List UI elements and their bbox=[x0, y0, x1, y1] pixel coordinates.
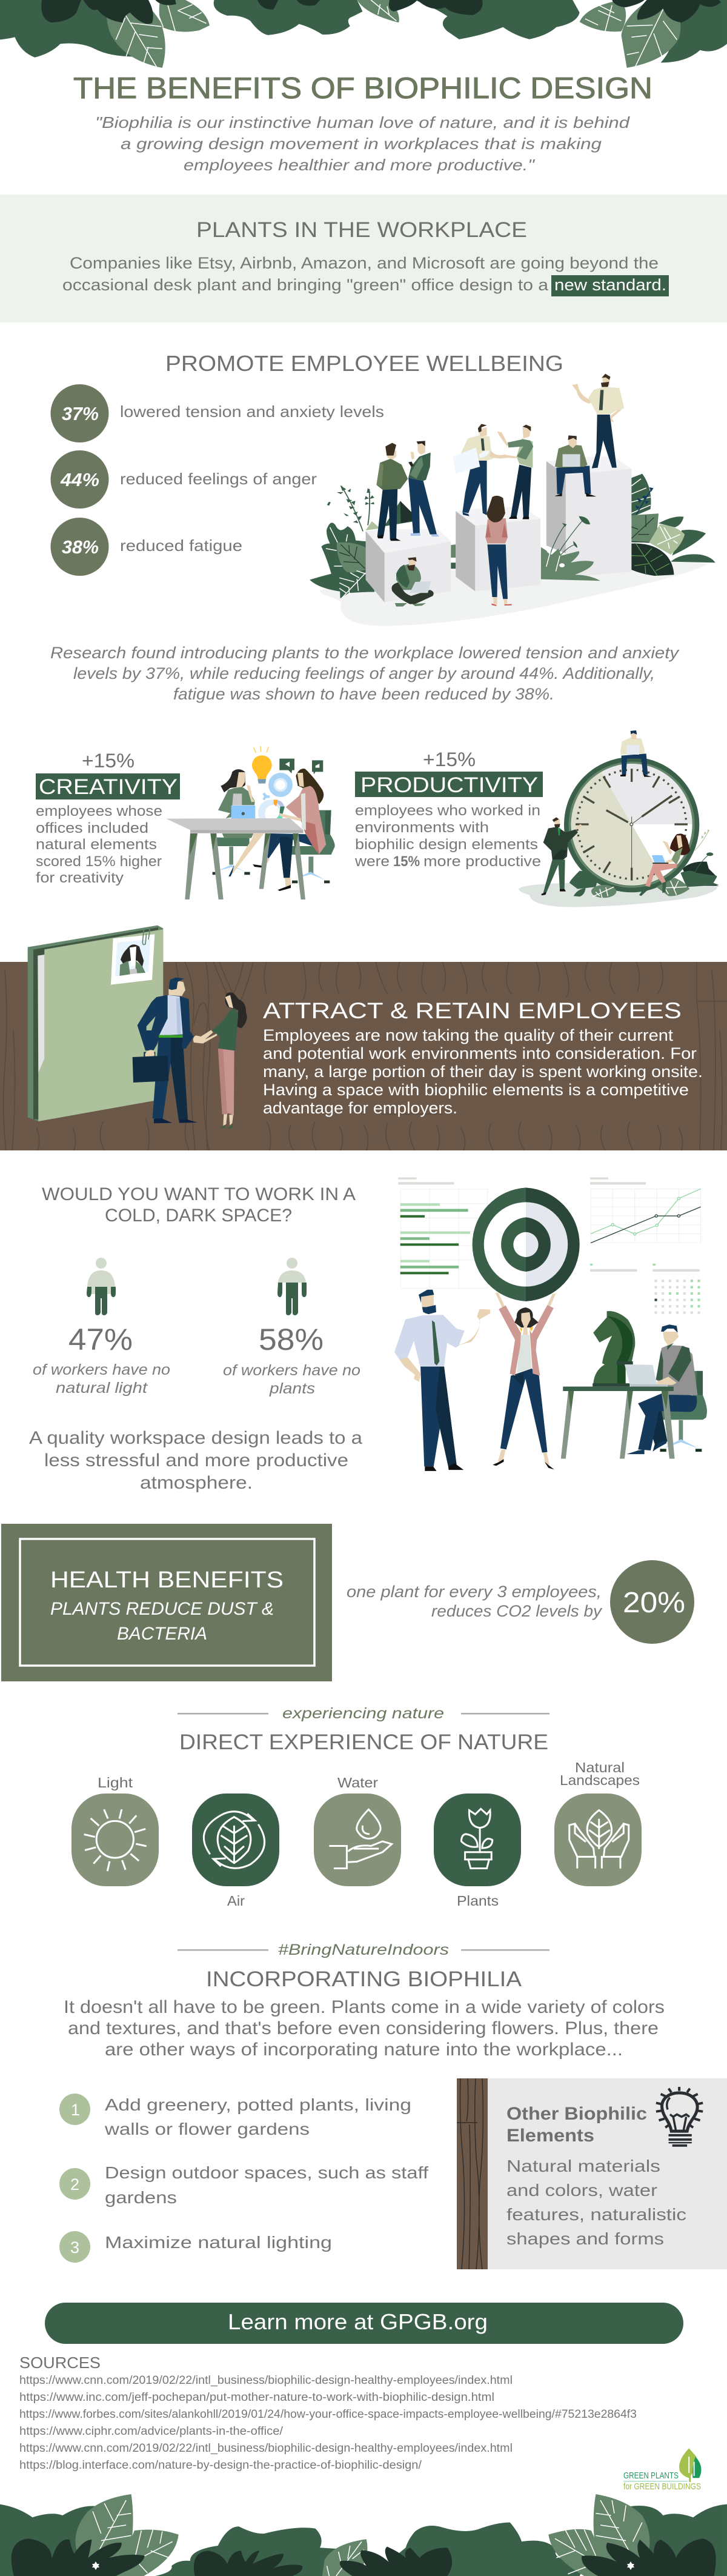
incorporating paragraph: and textures, and that's before even considering flowers. Plus, there bbox=[68, 2018, 659, 2038]
sources: https://www.forbes.com/sites/alankohll/2019/01/24/how-your-office-space-impacts-employee-wellbeing/#75213e2864f3 bbox=[19, 2408, 637, 2421]
blocks bbox=[451, 544, 456, 558]
creativity text: for creativity bbox=[36, 870, 124, 886]
productivity label: PRODUCTIVITY bbox=[360, 773, 538, 797]
icon labels bbox=[98, 1760, 640, 1909]
divider: experiencing nature: experiencing nature bbox=[282, 1705, 444, 1722]
panel: productivity bbox=[354, 749, 543, 870]
list item 1: 1 bbox=[71, 2101, 80, 2119]
figure: seated man with laptop bbox=[555, 435, 596, 496]
productivity text: biophilic design elements bbox=[355, 836, 538, 853]
illustration: target, charts and team bbox=[394, 1178, 707, 1471]
creativity text: offices included bbox=[36, 820, 148, 836]
list item 1 bbox=[59, 2094, 411, 2138]
productivity text: were bbox=[354, 853, 390, 870]
intro quote: "Biophilia is our instinctive human love of nature, and it is behind bbox=[95, 113, 631, 132]
bar chart background bbox=[398, 1178, 488, 1288]
icon labels: Light bbox=[98, 1775, 133, 1790]
panel: other biophilic elements bbox=[457, 2078, 727, 2269]
panel: health benefits: HEALTH BENEFITS bbox=[50, 1567, 284, 1593]
research paragraph: fatigue was shown to have been reduced by 38%. bbox=[173, 685, 554, 703]
centre plant bbox=[541, 516, 600, 581]
chair right bbox=[291, 810, 335, 855]
call to action button bbox=[45, 2303, 683, 2344]
productivity text bbox=[354, 802, 541, 870]
heading: cold dark space bbox=[42, 1184, 356, 1226]
paragraph: Having a space with biophilic elements is a competitive bbox=[263, 1081, 689, 1099]
list item 3: Maximize natural lighting bbox=[105, 2233, 332, 2252]
paragraph: occasional desk plant and bringing "green" office design to a bbox=[62, 276, 549, 294]
stat: 38 percent: reduced fatigue bbox=[120, 536, 242, 555]
panel: productivity: +15% bbox=[423, 749, 476, 770]
stat: 58 percent no plants: of workers have no bbox=[223, 1362, 360, 1379]
body text: shapes and forms bbox=[506, 2229, 664, 2248]
line chart background bbox=[590, 1178, 701, 1243]
quality workspace statement: A quality workspace design leads to a bbox=[29, 1428, 362, 1448]
resume photo bbox=[111, 934, 154, 985]
creativity text: scored 15% higher bbox=[36, 853, 162, 870]
stat: 20 percent bbox=[610, 1560, 694, 1644]
research paragraph: Research found introducing plants to the workplace lowered tension and anxiety bbox=[50, 644, 680, 662]
creativity text: natural elements bbox=[36, 836, 157, 853]
stat: 58 percent no plants: 58% bbox=[259, 1323, 324, 1356]
icon: water bbox=[314, 1794, 401, 1886]
icon labels: Landscapes bbox=[560, 1772, 640, 1788]
figure: standing bearded man bbox=[572, 374, 624, 469]
illustration: two women at table bbox=[166, 746, 335, 899]
flower right bbox=[627, 2561, 634, 2570]
stat: 37 percent bbox=[51, 384, 384, 442]
research paragraph: levels by 37%, while reducing feelings of anger by around 44%. Additionally, bbox=[73, 664, 655, 682]
body text: Natural materials bbox=[506, 2157, 660, 2175]
figure: top man bbox=[620, 730, 652, 777]
CO2 callout text: one plant for every 3 employees, bbox=[347, 1583, 602, 1601]
productivity text: 15% bbox=[393, 853, 420, 870]
icon: natural landscapes bbox=[554, 1794, 642, 1886]
left plants bbox=[310, 486, 413, 598]
heading: cold dark space: WOULD YOU WANT TO WORK IN A bbox=[42, 1184, 356, 1204]
paragraph: Companies like Etsy, Airbnb, Amazon, and Microsoft are going beyond the bbox=[70, 254, 659, 272]
icon: light bbox=[71, 1794, 159, 1886]
incorporating paragraph bbox=[64, 1997, 665, 2060]
subheading: Other Biophilic bbox=[506, 2104, 647, 2124]
panel: attract and retain employees bbox=[0, 926, 727, 1150]
list item 1: Add greenery, potted plants, living bbox=[105, 2095, 411, 2114]
figure: man in green from behind bbox=[376, 443, 408, 541]
paragraph bbox=[62, 254, 659, 294]
creativity text: employees whose bbox=[36, 803, 162, 819]
sources: https://www.cnn.com/2019/02/22/intl_business/biophilic-design-healthy-employees/index.html bbox=[19, 2442, 513, 2455]
intro quote bbox=[95, 113, 631, 174]
stat: 58 percent no plants: plants bbox=[269, 1380, 315, 1397]
icon: light bulb bbox=[656, 2087, 703, 2147]
stat: 58 percent no plants bbox=[223, 1323, 360, 1397]
productivity text: more productive bbox=[423, 853, 541, 870]
figure: woman with laptop bbox=[639, 833, 690, 896]
research paragraph bbox=[50, 644, 680, 703]
logo: green plants for green buildings: GREEN PLANTS bbox=[623, 2471, 679, 2481]
intro quote: employees healthier and more productive." bbox=[184, 156, 536, 174]
creativity text bbox=[36, 803, 162, 886]
figure: woman holding target bbox=[493, 1305, 554, 1469]
stat: 20 percent: 20% bbox=[623, 1587, 685, 1619]
quality workspace statement: atmosphere. bbox=[140, 1473, 253, 1493]
list item 3: 3 bbox=[70, 2238, 79, 2257]
top foliage border bbox=[0, 0, 727, 68]
subheading: Elements bbox=[506, 2126, 594, 2146]
stat: 38 percent bbox=[51, 518, 242, 576]
creativity label: CREATIVITY bbox=[39, 775, 178, 799]
panel: health benefits: BACTERIA bbox=[117, 1624, 207, 1644]
figure: man with phone bbox=[408, 441, 439, 536]
icon: air bbox=[192, 1794, 279, 1886]
quality workspace statement: less stressful and more productive bbox=[44, 1450, 348, 1470]
skin leg bbox=[230, 833, 264, 874]
stat: 47 percent no natural light bbox=[33, 1323, 170, 1396]
heading: ATTRACT & RETAIN EMPLOYEES bbox=[263, 998, 682, 1023]
figure: man with puzzle piece bbox=[453, 424, 508, 516]
list item 2: gardens bbox=[105, 2188, 177, 2207]
heading: direct experience of nature: DIRECT EXPERIENCE OF NATURE bbox=[179, 1730, 548, 1754]
sources: https://www.cnn.com/2019/02/22/intl_business/biophilic-design-healthy-employees/index.html bbox=[19, 2374, 513, 2387]
main title: THE BENEFITS OF BIOPHILIC DESIGN bbox=[73, 72, 652, 105]
dot grid bbox=[590, 1264, 700, 1314]
logo: green plants for green buildings bbox=[623, 2448, 702, 2492]
body text bbox=[506, 2157, 686, 2248]
CO2 callout text: reduces CO2 levels by bbox=[431, 1602, 603, 1620]
logo: green plants for green buildings: for GREEN BUILDINGS bbox=[623, 2481, 701, 2492]
figure: woman from behind bbox=[485, 496, 512, 606]
panel: plants in the workplace bbox=[0, 195, 727, 322]
wood grain bbox=[3, 962, 727, 1150]
table bbox=[185, 833, 305, 899]
figure: bearded man bbox=[394, 1290, 490, 1471]
pictogram: 58 percent person bbox=[277, 1258, 307, 1315]
icon labels: Plants bbox=[457, 1893, 499, 1909]
paragraph: many, a large portion of their day is spent working onsite. bbox=[263, 1063, 703, 1081]
incorporating paragraph: It doesn't all have to be green. Plants come in a wide variety of colors bbox=[64, 1997, 665, 2017]
list item 1: walls or flower gardens bbox=[104, 2120, 310, 2138]
panel: health benefits bbox=[1, 1524, 332, 1681]
stat: 44 percent bbox=[51, 450, 317, 509]
illustration: clock with workers bbox=[519, 730, 719, 907]
icon labels: Air bbox=[227, 1893, 245, 1909]
quality workspace statement bbox=[29, 1428, 362, 1493]
sources: https://www.ciphr.com/advice/plants-in-the-office/ bbox=[19, 2425, 284, 2438]
productivity text: environments with bbox=[355, 819, 489, 836]
paragraph bbox=[263, 1026, 703, 1117]
icon labels: Natural bbox=[575, 1760, 625, 1775]
divider: bring nature indoors: #BringNatureIndoors bbox=[278, 1941, 449, 1958]
illustration: people on blocks bbox=[310, 374, 715, 626]
body text: features, naturalistic bbox=[506, 2205, 686, 2224]
icon: plants bbox=[434, 1794, 521, 1886]
call to action button: Learn more at GPGB.org bbox=[228, 2309, 488, 2334]
incorporating paragraph: are other ways of incorporating nature into the workplace... bbox=[105, 2040, 623, 2060]
figure: man shaking hands bbox=[497, 425, 533, 519]
sources: SOURCES bbox=[19, 2354, 101, 2372]
figure: man sitting on floor bbox=[391, 557, 434, 607]
intro quote: a growing design movement in workplaces that is making bbox=[121, 135, 602, 153]
paragraph: Employees are now taking the quality of their current bbox=[263, 1026, 674, 1044]
heading: promote employee wellbeing: PROMOTE EMPLOYEE WELLBEING bbox=[165, 351, 563, 376]
stat: 37 percent: lowered tension and anxiety levels bbox=[120, 402, 384, 421]
right woman bbox=[296, 769, 324, 804]
stat: 47 percent no natural light: 47% bbox=[68, 1323, 133, 1356]
leaves at clock base bbox=[591, 885, 616, 898]
panel: health benefits: PLANTS REDUCE DUST & bbox=[50, 1599, 274, 1619]
highlight: new standard: new standard. bbox=[554, 276, 666, 294]
heading: incorporating biophilia: INCORPORATING BIOPHILIA bbox=[206, 1967, 522, 1991]
pictogram: 47 percent person bbox=[87, 1258, 116, 1315]
chair left bbox=[212, 838, 250, 846]
stat: 37 percent: 37% bbox=[62, 403, 99, 424]
stat: 47 percent no natural light: natural light bbox=[56, 1380, 148, 1396]
list item 2 bbox=[59, 2163, 428, 2207]
stat: 38 percent: 38% bbox=[62, 536, 99, 558]
CO2 callout text bbox=[347, 1583, 603, 1620]
list item 3 bbox=[59, 2231, 332, 2263]
subheading bbox=[506, 2104, 647, 2146]
illustration: folder and handshake bbox=[28, 926, 247, 1129]
sources bbox=[19, 2354, 637, 2472]
businessman bbox=[153, 1038, 188, 1120]
list item 2: 2 bbox=[70, 2175, 79, 2194]
right plants bbox=[631, 474, 715, 576]
paragraph: and potential work environments into consideration. For bbox=[263, 1044, 697, 1063]
heading: cold dark space: COLD, DARK SPACE? bbox=[105, 1206, 292, 1226]
stat: 44 percent: 44% bbox=[60, 469, 99, 490]
productivity text: employees who worked in bbox=[355, 802, 540, 819]
bottom foliage border bbox=[0, 2494, 727, 2576]
target bbox=[473, 1187, 580, 1307]
stat: 44 percent: reduced feelings of anger bbox=[120, 470, 317, 488]
icon labels: Water bbox=[337, 1775, 378, 1790]
left woman bbox=[221, 769, 245, 792]
paragraph: advantage for employers. bbox=[263, 1099, 457, 1117]
body text: and colors, water bbox=[506, 2181, 657, 2200]
sources: https://www.inc.com/jeff-pochepan/put-mother-nature-to-work-with-biophilic-design.html bbox=[19, 2391, 494, 2404]
panel: creativity: +15% bbox=[82, 750, 134, 772]
flower left bbox=[92, 2561, 99, 2570]
panel: creativity bbox=[36, 750, 180, 886]
stat: 47 percent no natural light: of workers have no bbox=[33, 1361, 170, 1378]
sources: https://blog.interface.com/nature-by-design-the-practice-of-biophilic-design/ bbox=[19, 2459, 422, 2472]
businesswoman bbox=[193, 1030, 217, 1044]
list item 2: Design outdoor spaces, such as staff bbox=[105, 2163, 428, 2182]
colour wheel bbox=[258, 799, 283, 827]
figure: suit man bbox=[541, 817, 583, 895]
figure: desk with knight and man bbox=[561, 1311, 707, 1459]
heading: PLANTS IN THE WORKPLACE bbox=[196, 218, 527, 242]
